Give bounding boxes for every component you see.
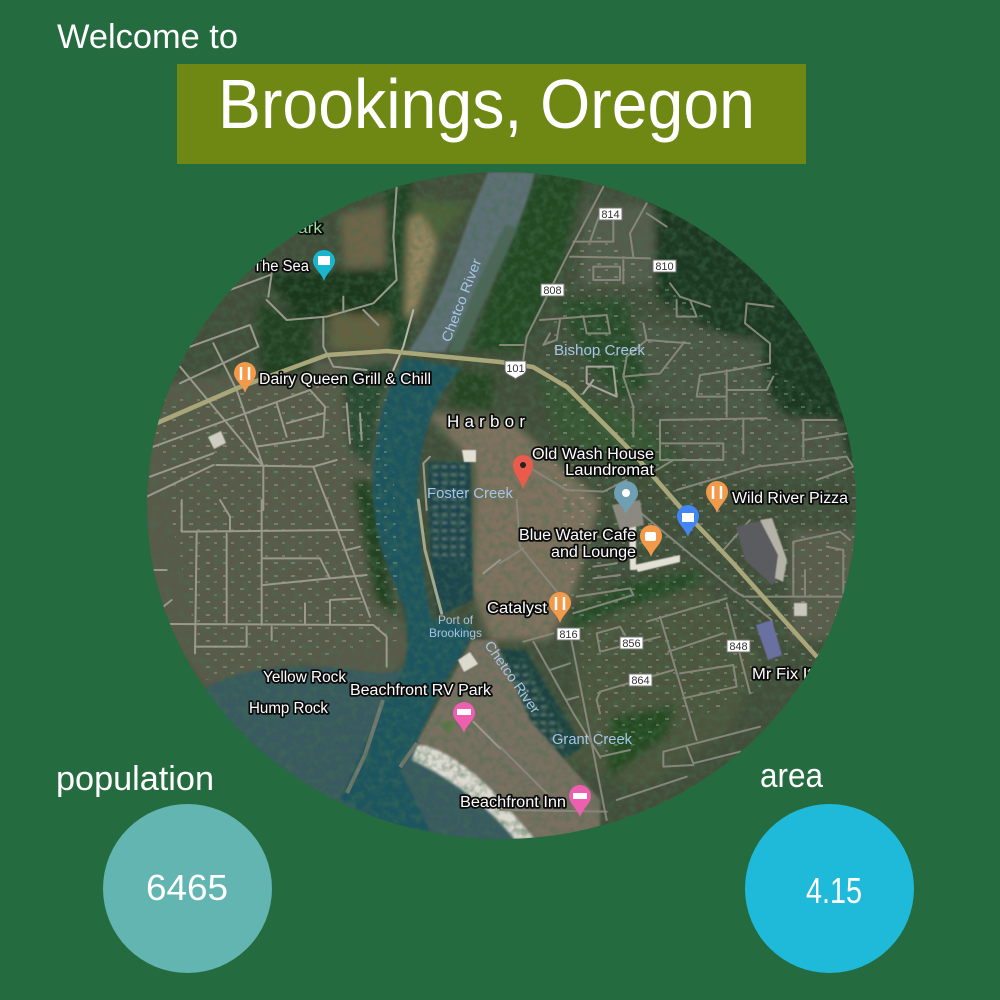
title banner: Brookings, Oregon <box>218 65 755 143</box>
route shields: 810 <box>655 261 674 273</box>
house speckle <box>147 220 860 760</box>
route shields: 814 <box>601 209 620 221</box>
beach and spit <box>412 640 600 850</box>
water labels: Foster Creek <box>427 485 513 502</box>
water labels: Chetco River <box>438 256 484 344</box>
water labels <box>427 256 646 748</box>
place name labels: Beachfront Inn <box>460 794 566 811</box>
place name labels: and Lounge <box>551 544 636 561</box>
place name labels: Mr Fix It <box>752 666 813 683</box>
place name labels: Harbor <box>447 412 525 431</box>
buildings and parking <box>208 431 807 672</box>
water labels: Port of <box>438 613 474 627</box>
place name labels: Dairy Queen Grill & Chill <box>259 371 431 388</box>
water labels: Brookings <box>429 626 482 640</box>
place name labels: Yellow Rock <box>263 669 346 686</box>
route shields: 848 <box>729 641 748 653</box>
circular satellite map <box>140 165 865 850</box>
route shields: 816 <box>559 629 578 641</box>
place name labels: Beachfront RV Park <box>350 682 491 699</box>
place name labels: Old Wash House <box>532 446 654 463</box>
place name labels: Wild River Pizza <box>732 490 848 507</box>
population label: population <box>56 760 214 798</box>
map terrain <box>140 172 860 790</box>
route shields: 101 <box>506 363 525 375</box>
sea and river <box>200 172 583 850</box>
place name labels: Hump Rock <box>249 700 328 717</box>
route shields <box>505 208 750 687</box>
place name labels: The Sea <box>253 258 309 275</box>
population circle <box>103 804 272 973</box>
water labels: Bishop Creek <box>554 342 646 359</box>
population circle: 6465 <box>146 867 228 908</box>
southwest road network <box>153 500 500 748</box>
northeast road network <box>500 187 853 492</box>
map pins <box>234 250 728 817</box>
noise texture <box>140 165 865 845</box>
area label: area <box>760 757 823 795</box>
highway 101 <box>157 351 817 657</box>
southeast road network <box>500 500 850 820</box>
place name labels: ark <box>298 220 322 237</box>
route shields: 808 <box>543 285 562 297</box>
route shields: 864 <box>631 675 650 687</box>
place name labels: Laundromat <box>565 462 655 479</box>
area circle <box>745 804 914 973</box>
place name labels: Catalyst <box>487 600 548 617</box>
west road network upper <box>147 187 430 510</box>
area circle: 4.15 <box>806 870 862 911</box>
jetties <box>347 700 417 793</box>
place name labels: Blue Water Cafe <box>519 527 636 544</box>
water labels: Grant Creek <box>552 731 632 748</box>
route shields: 856 <box>622 638 641 650</box>
welcome heading: Welcome to <box>57 18 238 56</box>
place name labels <box>249 220 848 811</box>
water labels: Chetco River <box>482 638 544 717</box>
